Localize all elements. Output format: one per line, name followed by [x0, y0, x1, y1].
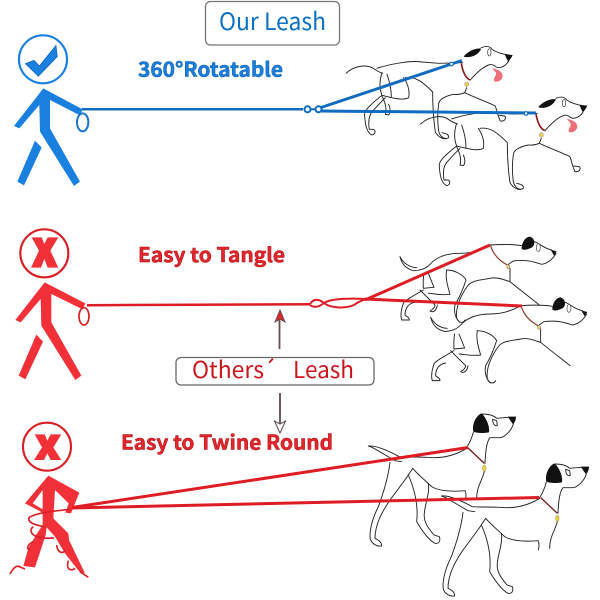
label: Easy to Tangle: Easy to Tangle — [138, 239, 285, 268]
figure: blue person with check icon — [14, 35, 88, 186]
heading: Others' Leash box: Others — [192, 351, 264, 385]
figure: red person with X icon — [15, 229, 89, 380]
heading: Our Leash box: Our Leash — [219, 2, 326, 37]
label: Easy to Twine Round: Easy to Twine Round — [121, 426, 333, 456]
figure: red person twined by leash — [10, 423, 88, 577]
heading: Others' Leash box — [176, 351, 374, 385]
blue leash with rotating split — [82, 60, 536, 115]
label: 360 Rotatable: 360°Rotatable — [138, 54, 283, 82]
heading: Others' Leash box: Leash — [293, 351, 354, 385]
walking dogs: red group — [368, 413, 589, 596]
red leash with tangled knot — [87, 245, 522, 307]
heading: Others' Leash box: ´ — [263, 351, 277, 385]
arrow: down to twine — [274, 393, 286, 433]
arrow: up to tangle — [275, 310, 285, 349]
leaping dogs: red group — [400, 237, 587, 383]
red leashes: twine to both dogs — [72, 448, 539, 508]
heading: Our Leash box — [206, 2, 340, 45]
running dogs: blue group — [346, 46, 587, 189]
